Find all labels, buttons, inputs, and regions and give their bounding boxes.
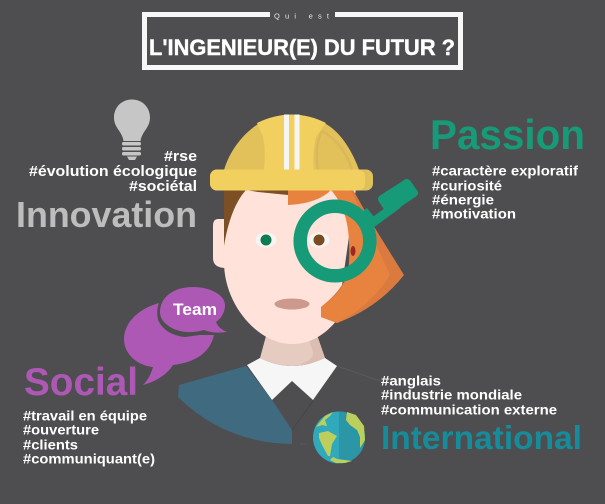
social tags: #travail en équipe — [23, 408, 147, 424]
heading: Social: Social — [24, 361, 138, 404]
jacket blue lapel — [178, 366, 292, 444]
helmet — [210, 114, 373, 190]
heading: Passion: Passion — [430, 111, 585, 158]
social tags: #clients — [23, 436, 78, 452]
neck — [260, 335, 325, 366]
innovation tags: #évolution écologique — [29, 164, 197, 180]
main title: L'INGENIEUR(E) DU FUTUR ? — [149, 35, 455, 60]
large bubble — [124, 303, 214, 385]
international block — [381, 372, 582, 456]
ear — [213, 219, 226, 268]
small heading: Qui est: Qui est — [274, 12, 330, 20]
heading: International: International — [381, 419, 582, 456]
face — [224, 188, 356, 344]
title frame — [144, 12, 460, 68]
international tags — [381, 372, 557, 418]
magnifying glass — [300, 183, 414, 276]
passion tags: #curiosité — [432, 178, 502, 194]
faint right shoulder — [300, 366, 383, 444]
character illustration — [178, 114, 414, 444]
icon: globe — [313, 412, 365, 464]
passion block — [430, 111, 585, 222]
international tags: #anglais — [381, 372, 441, 388]
passion tags — [432, 162, 578, 222]
passion tags: #caractère exploratif — [432, 162, 578, 178]
icon: light bulb — [114, 100, 150, 160]
earring — [350, 246, 356, 256]
innovation tags: #sociétal — [129, 179, 197, 195]
collar — [247, 358, 337, 400]
social tags: #ouverture — [23, 422, 99, 438]
innovation tags: #rse — [164, 149, 197, 165]
passion tags: #motivation — [432, 206, 516, 222]
brown hair — [224, 188, 288, 246]
left eye — [256, 232, 276, 248]
right eye — [308, 232, 330, 248]
icon: speech bubbles — [124, 287, 227, 385]
international tags: #communication externe — [381, 402, 557, 418]
mouth — [274, 298, 310, 310]
team bubble — [160, 287, 227, 333]
continents — [316, 412, 365, 463]
passion tags: #énergie — [432, 192, 494, 208]
international tags: #industrie mondiale — [381, 386, 522, 402]
orange hair back — [321, 188, 404, 323]
social tags: #communiquant(e) — [23, 450, 155, 466]
social tags — [23, 408, 155, 466]
orange hair front — [288, 188, 390, 323]
bubble label: Team — [173, 300, 217, 319]
innovation block — [16, 149, 197, 235]
heading: Innovation: Innovation — [16, 194, 197, 235]
innovation tags — [29, 149, 197, 195]
social block — [23, 361, 155, 466]
